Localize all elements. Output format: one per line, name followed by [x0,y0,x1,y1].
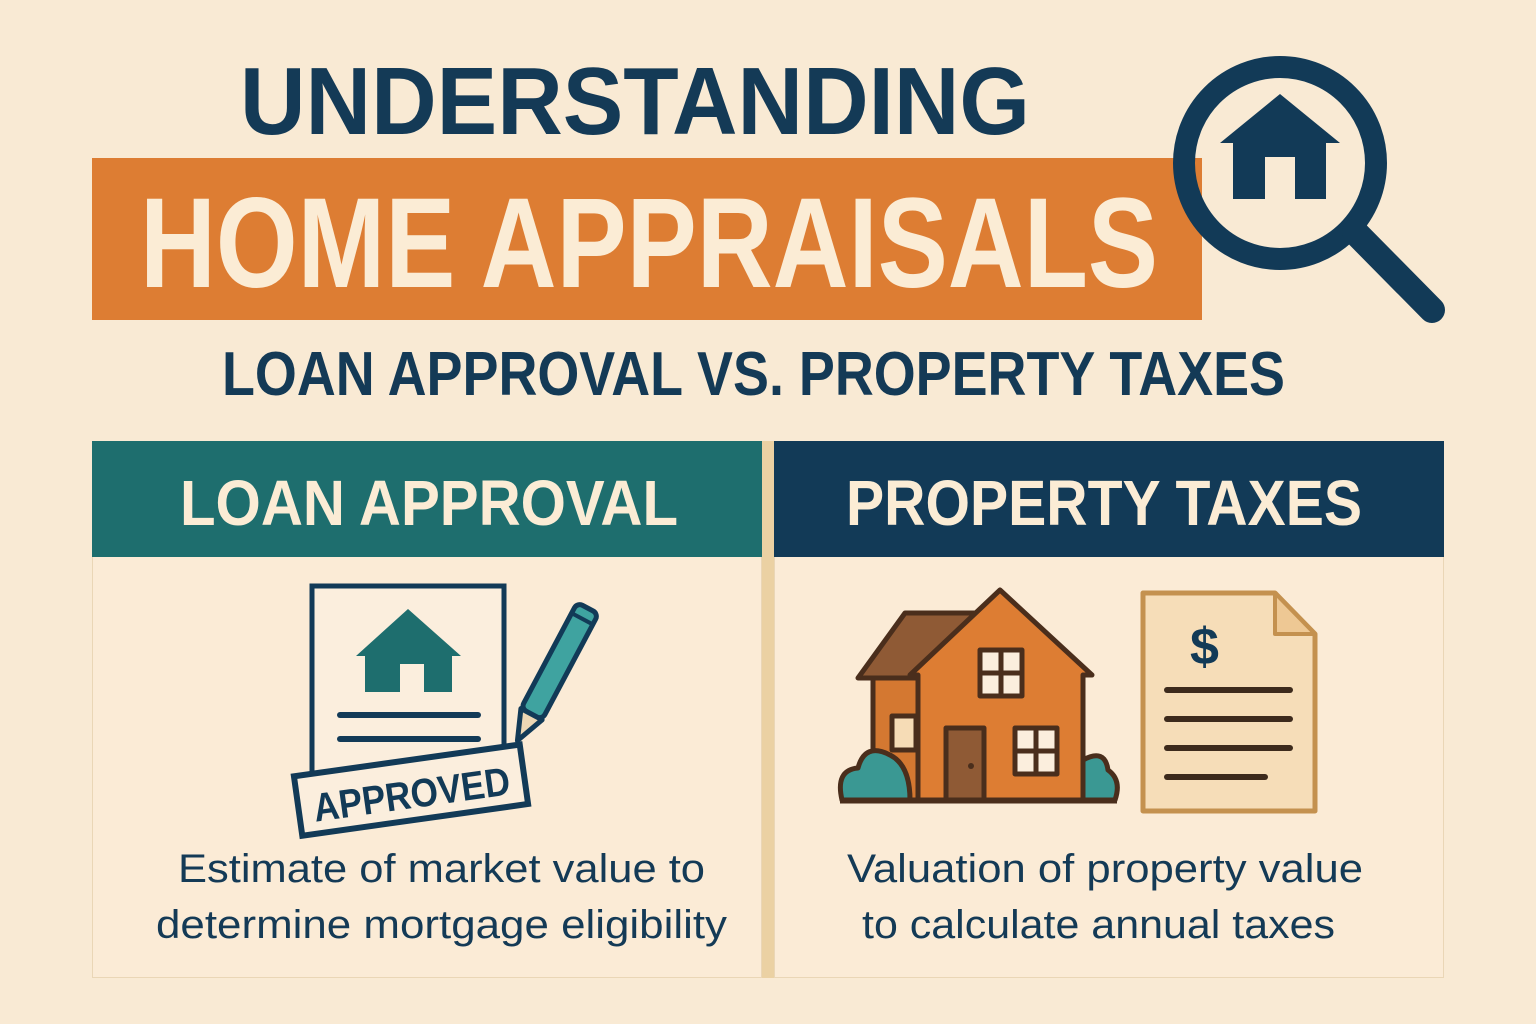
title: understanding: UNDERSTANDING [240,48,1030,155]
text: loan approval description: determine mortgage eligibility [156,903,727,947]
icon: tax document: $ [1190,618,1219,676]
text: loan approval description [156,847,727,947]
panel header: loan approval: LOAN APPROVAL [180,467,678,539]
panel header: loan approval [92,441,762,557]
divider strip [762,441,774,978]
text: property taxes description: Valuation of property value [847,847,1363,891]
text: loan approval description: Estimate of market value to [178,847,705,891]
text: property taxes description [847,847,1363,947]
icon: approved document with pen: APPROVED [311,760,513,831]
icon: approved document with pen [294,586,598,836]
panel header: property taxes: PROPERTY TAXES [846,467,1362,539]
icon: magnifying glass with house [1184,67,1432,310]
icon: house [840,590,1117,801]
panel header: property taxes [774,441,1444,557]
icon: tax document [1143,593,1315,811]
title banner: home appraisals: HOME APPRAISALS [140,172,1158,315]
panel: loan approval [92,441,762,978]
text: property taxes description: to calculate annual taxes [862,903,1335,947]
subtitle: LOAN APPROVAL VS. PROPERTY TAXES [222,340,1285,409]
panel: property taxes [774,441,1444,978]
